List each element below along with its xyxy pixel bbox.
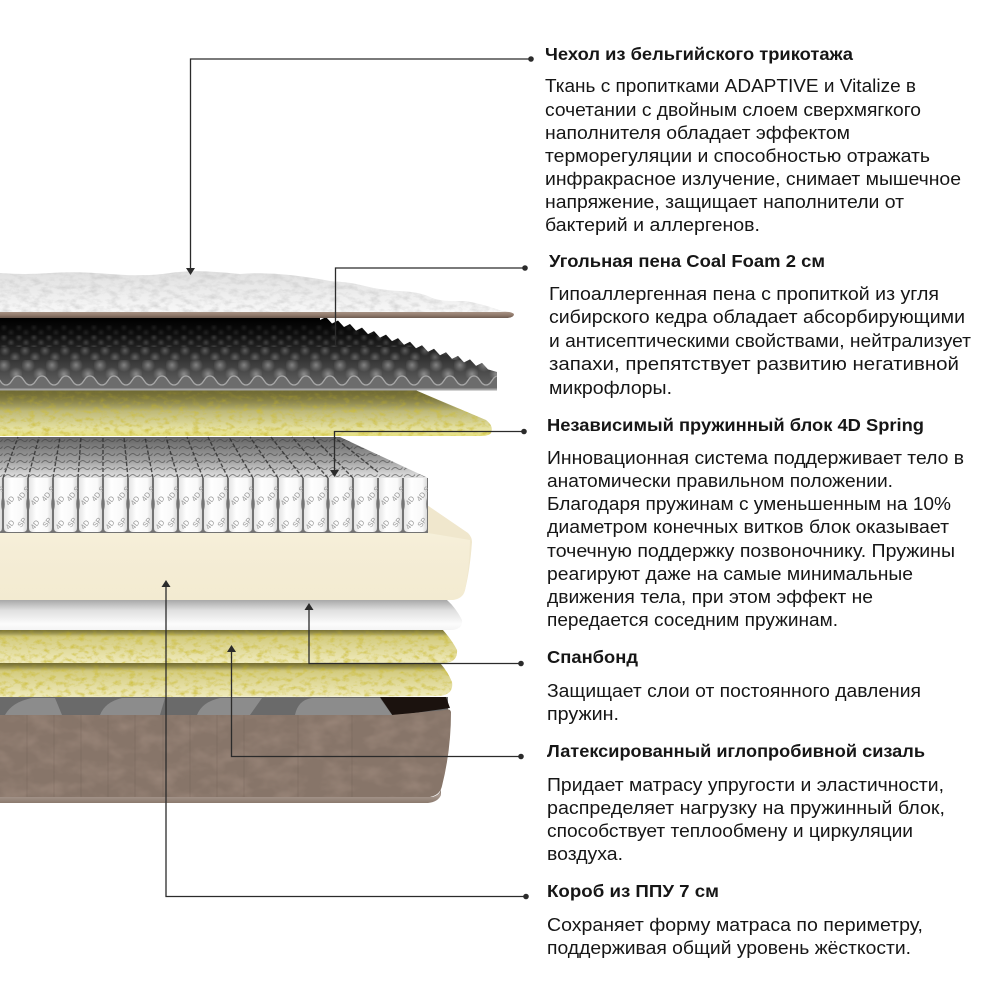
leader: coal foam [336,265,528,345]
description: coal foam: сибирского кедра обладает абсорбирующими [549,307,965,327]
description: spunbond: пружин. [547,704,619,724]
description: spunbond: Защищает слои от постоянного давления [547,681,921,701]
heading: spring block: Независимый пружинный блок 4D Spring [547,415,924,435]
description: cover: терморегуляции и способностью отражать [545,146,930,166]
heading: sisal: Латексированный иглопробивной сизаль [547,741,925,761]
description: coal foam: микрофлоры. [549,378,672,398]
leader: spring block [330,429,527,477]
description: spring block: Инновационная система поддерживает тело в [547,448,964,468]
heading: spunbond: Спанбонд [547,647,638,667]
text block: foam box [547,881,923,958]
description: sisal: Придает матрасу упругости и эластичности, [547,775,944,795]
description: sisal: воздуха. [547,844,623,864]
description: sisal: распределяет нагрузку на пружинный блок, [547,798,945,818]
layer: box with springs inside [0,697,451,803]
description: cover: наполнителя обладает эффектом [545,123,850,143]
description: cover: сочетании с двойным слоем сверхмягкого [545,100,921,120]
text block: spunbond [547,647,921,724]
text block: coal foam [549,251,971,398]
description: foam box: Сохраняет форму матраса по периметру, [547,915,923,935]
heading: coal foam: Угольная пена Coal Foam 2 см [549,251,825,271]
description: spring block: диаметром конечных витков блок оказывает [547,517,949,537]
layer: sisal upper [0,629,457,663]
description: sisal [547,775,945,864]
leader: spunbond [304,603,524,666]
description: spring block: движения тела, при этом эффект не [547,587,873,607]
description: coal foam: Гипоаллергенная пена с пропиткой из угля [549,284,939,304]
description: spring block: точечную поддержку позвоночнику. Пружины [547,541,955,561]
layer: foam base [0,505,472,600]
layer: spunbond [0,600,462,630]
description: cover: бактерий и аллергенов. [545,215,760,235]
layer: coal foam [0,317,500,390]
leader: foam box [162,580,529,899]
text block: sisal [547,741,945,864]
layer: pocket spring block [0,437,428,533]
description: spring block: анатомически правильном положении. [547,471,893,491]
description: spring block: Благодаря пружинам с уменьшенным на 10% [547,494,951,514]
description: sisal: способствует теплообмену и циркуляции [547,821,913,841]
description: spunbond [547,681,921,724]
description: cover: напряжение, защищает наполнители от [545,192,904,212]
description: cover [545,76,961,235]
layer: sisal lower [0,663,452,697]
description: spring block: передается соседним пружинам. [547,610,838,630]
description: cover: Ткань с пропитками ADAPTIVE и Vitalize в [545,76,916,96]
description: spring block: реагируют даже на самые минимальные [547,564,913,584]
description: foam box: поддерживая общий уровень жёсткости. [547,938,911,958]
text block: cover [545,44,961,235]
layer: knitted cover [0,271,514,318]
leader: cover [186,56,534,275]
description: foam box [547,915,923,958]
description: coal foam [549,284,971,398]
description: coal foam: и антисептическими свойствами, нейтрализует [549,331,971,351]
leader: sisal [227,645,524,759]
heading: cover: Чехол из бельгийского трикотажа [545,44,853,64]
heading: foam box: Короб из ППУ 7 см [547,881,719,901]
text block: spring block [547,415,964,630]
mattress layers illustration [0,271,514,803]
description: spring block [547,448,964,630]
description: cover: инфракрасное излучение, снимает мышечное [545,169,961,189]
description: coal foam: запахи, препятствует развитию негативной [549,354,959,374]
layer: sisal under foam [0,390,492,436]
